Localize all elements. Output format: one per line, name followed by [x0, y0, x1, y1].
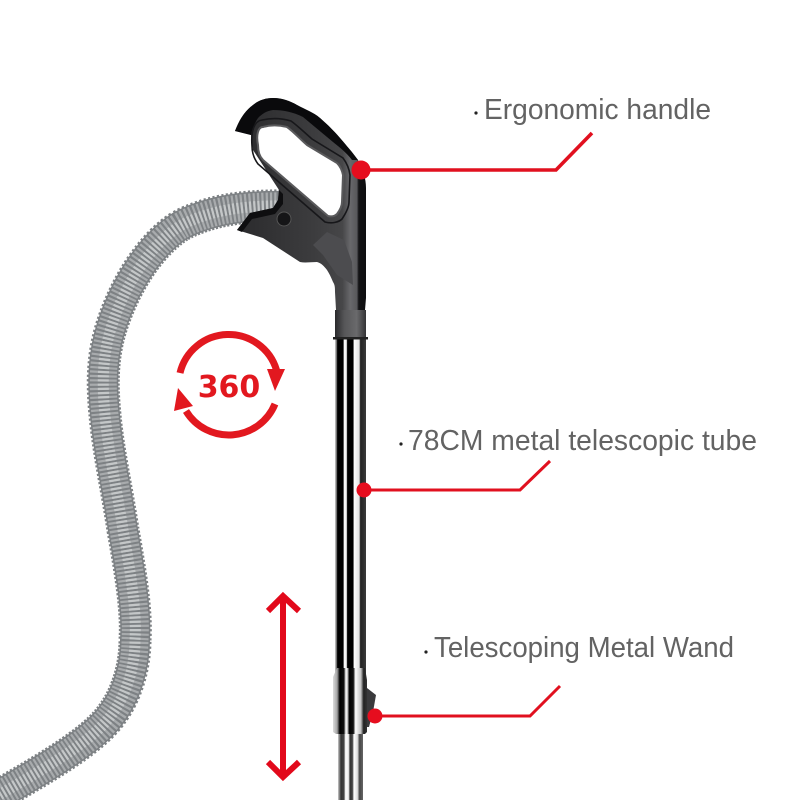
- handle inner rim: [257, 126, 343, 216]
- left arrowhead: [174, 388, 193, 411]
- top arc: [180, 335, 276, 373]
- metal telescopic tube: [335, 338, 366, 676]
- label: 78CM metal telescopic tube: [408, 425, 757, 457]
- right arrowhead: [267, 369, 285, 391]
- label: Telescoping Metal Wand: [434, 632, 734, 664]
- handle neck ring: [335, 310, 366, 337]
- handle: [235, 98, 368, 340]
- red dot: [356, 482, 372, 498]
- body facet highlight: [313, 232, 353, 285]
- bullet: [399, 442, 403, 446]
- leader line: [375, 686, 560, 716]
- icon: double-headed arrow: [268, 596, 299, 777]
- label: Ergonomic handle: [484, 94, 711, 126]
- hose: [0, 206, 285, 800]
- leader line: [364, 461, 550, 490]
- handle body: [235, 98, 366, 310]
- bottom arc: [186, 404, 275, 435]
- leader line: [361, 133, 592, 170]
- red dot: [352, 160, 370, 180]
- handle button: [277, 212, 291, 226]
- 360 text: 360: [198, 370, 260, 405]
- icon: 360 rotation: [174, 335, 285, 435]
- red dot: [368, 708, 382, 724]
- bullet: [474, 111, 478, 115]
- lower inner tube: [338, 732, 363, 800]
- bullet: [424, 650, 428, 654]
- collar slider button: [367, 688, 376, 727]
- black top grip: [235, 98, 358, 160]
- tube sliding collar: [333, 668, 367, 734]
- callout: metal telescopic tube: [356, 425, 757, 498]
- dark joint with hose: [237, 190, 283, 232]
- callout: telescoping metal wand: [368, 632, 734, 724]
- callout: ergonomic handle: [352, 94, 711, 180]
